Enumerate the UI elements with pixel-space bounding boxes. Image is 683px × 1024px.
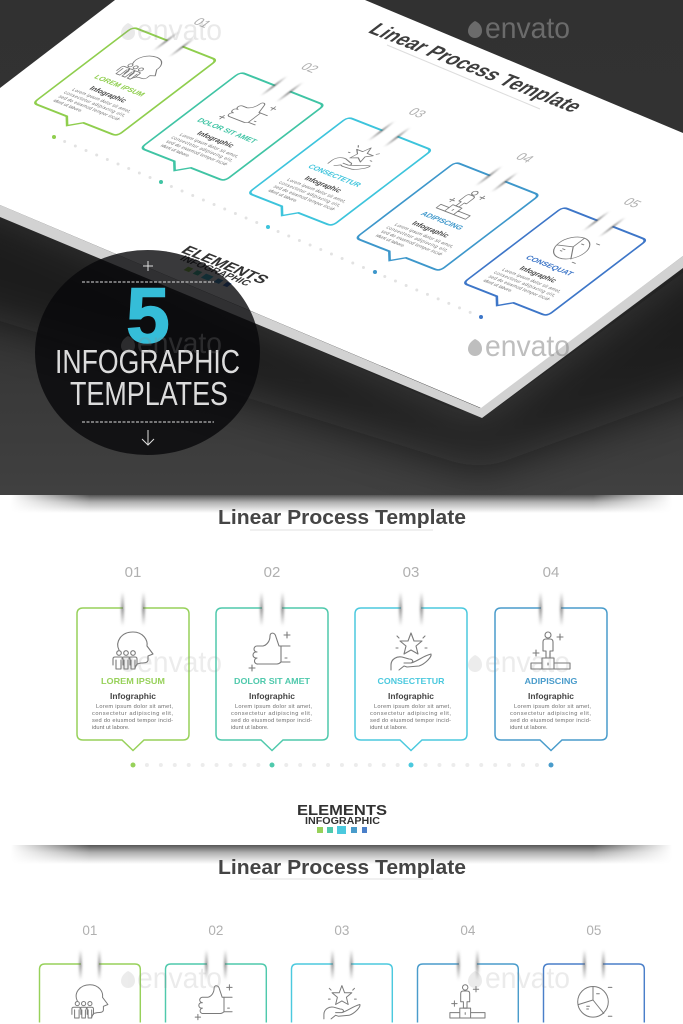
card 02 small (166, 923, 266, 1022)
mockup card 5: sed do eiusmod tempor incid- (486, 274, 552, 302)
mockup card 5: 05 (620, 195, 645, 210)
mockup card 4: ADIPISCING (418, 210, 466, 231)
mockup card 5: Infographic (517, 265, 559, 284)
card 01: LOREM IPSUM (101, 676, 165, 686)
card 04: 04 (543, 564, 559, 581)
card 02: sed do eiusmod tempor incid- (231, 718, 312, 724)
board side edge (0, 205, 683, 418)
mockup card 3: idunt ut labore. (266, 189, 299, 204)
elements infographic logo: INFOGRAPHIC (305, 816, 380, 827)
mockup card 4: Lorem ipsum dolor sit amet, (392, 223, 455, 249)
card 01: Lorem ipsum dolor sit amet, (96, 704, 173, 710)
mockup card 1: sed do eiusmod tempor incid- (56, 94, 122, 122)
mockup logo: INFOGRAPHIC (177, 254, 254, 288)
watermark: section 3 right: envato (485, 962, 570, 995)
mockup card 2: sed do eiusmod tempor incid- (164, 139, 230, 167)
card 01: sed do eiusmod tempor incid- (92, 718, 173, 724)
mockup card 3: Lorem ipsum dolor sit amet, (285, 178, 348, 204)
card 01: Infographic (110, 691, 156, 701)
section 2 background (0, 495, 683, 845)
card 04: consectetur adipiscing elit, (510, 711, 591, 717)
section 3: five-step template (40, 857, 644, 1022)
tilted mockup board (0, 0, 683, 418)
card 05 small (544, 923, 644, 1022)
mockup card 4: sed do eiusmod tempor incid- (379, 229, 445, 257)
card 05 small: 05 (586, 923, 601, 938)
card 03 small (292, 923, 392, 1022)
mockup card 4: Infographic (410, 220, 452, 239)
mockup logo: ELEMENTS (177, 244, 273, 287)
card 02: Lorem ipsum dolor sit amet, (235, 704, 312, 710)
card 02: 02 (264, 564, 280, 581)
mockup timeline dots (54, 137, 481, 317)
card 04: idunt ut labore. (510, 725, 548, 731)
section 2 top shadow band (0, 495, 683, 513)
mockup card 5: consectetur adipiscing elit, (492, 270, 557, 298)
card 03: Infographic (388, 691, 434, 701)
mockup card 1: LOREM IPSUM (92, 73, 147, 98)
mockup card 2: Infographic (195, 130, 237, 149)
section 3 title: Linear Process Template (218, 857, 466, 879)
elements infographic logo (297, 802, 387, 834)
down arrow icon (142, 430, 154, 445)
top dashed rule (82, 281, 214, 283)
watermark: section 3 left: envato (137, 962, 222, 995)
mockup card 4: 04 (512, 150, 538, 165)
badge circle (35, 250, 260, 455)
mockup card 1: idunt ut labore. (51, 99, 84, 114)
card 04: Lorem ipsum dolor sit amet, (514, 704, 591, 710)
mockup card 4: consectetur adipiscing elit, (384, 225, 450, 253)
card 02: Infographic (249, 691, 295, 701)
card 04 small: 04 (460, 923, 476, 938)
mockup card 3: sed do eiusmod tempor incid- (271, 184, 337, 212)
card 01 (77, 564, 189, 750)
card 04 small (418, 923, 518, 1022)
mockup card 3: 03 (405, 105, 430, 120)
mockup title underline (387, 45, 540, 109)
badge heading line 2: TEMPLATES (70, 375, 228, 412)
card 02: DOLOR SIT AMET (234, 676, 311, 686)
section 2 title: Linear Process Template (218, 507, 466, 529)
mockup card 2: DOLOR SIT AMET (195, 117, 260, 145)
plus icon (143, 261, 153, 271)
mockup infographic content (25, 1, 681, 322)
watermark: top left: envato (137, 14, 222, 47)
card 04: ADIPISCING (524, 676, 578, 686)
section 3 title underline (250, 878, 433, 880)
mockup card 3: CONSECTETUR (306, 163, 364, 189)
mockup card 2: 02 (297, 60, 323, 75)
card 03: Lorem ipsum dolor sit amet, (374, 704, 451, 710)
card 03: CONSECTETUR (378, 676, 444, 686)
card 02 (216, 564, 328, 750)
card 01 small (40, 923, 140, 1022)
big number 5: 5 (126, 271, 170, 359)
dark textured background (0, 0, 683, 495)
mockup card 5: CONSEQUAT (523, 254, 576, 278)
card 02 small: 02 (208, 923, 223, 938)
card 02: idunt ut labore. (231, 725, 269, 731)
card 03: idunt ut labore. (370, 725, 408, 731)
card 01: 01 (125, 564, 141, 581)
timeline dots (130, 762, 554, 768)
card 04: Infographic (528, 691, 574, 701)
mockup card 3: consectetur adipiscing elit, (277, 180, 342, 208)
section 3 top shadow band (0, 845, 683, 864)
mockup card 5: idunt ut labore. (481, 279, 514, 294)
card 03 (355, 564, 467, 750)
mockup card 4: idunt ut labore. (373, 234, 407, 249)
mockup card 1 (25, 1, 251, 142)
board shadow (0, 218, 683, 482)
card 01: consectetur adipiscing elit, (92, 711, 173, 717)
board surface (0, 0, 683, 408)
mockup card 1: Infographic (87, 85, 129, 104)
mockup card 5: Lorem ipsum dolor sit amet, (500, 268, 563, 294)
watermark: section 2 right: envato (485, 646, 570, 679)
mockup card 1: consectetur adipiscing elit, (62, 90, 127, 118)
watermark: section 2 left: envato (137, 646, 222, 679)
watermark: top right: envato (485, 12, 570, 45)
mockup card 1: 01 (190, 15, 215, 30)
card 01 small: 01 (82, 923, 97, 938)
mockup card 4 (348, 136, 573, 277)
mockup timeline markers (52, 135, 483, 319)
card 03: 03 (403, 564, 419, 581)
mockup card 3 (240, 91, 466, 232)
card 04 (495, 564, 607, 750)
section 2 title underline (250, 529, 433, 531)
watermark: mid right: envato (485, 330, 570, 363)
mockup title: Linear Process Template (363, 20, 588, 116)
mockup card 2: idunt ut labore. (158, 144, 192, 159)
mockup card 2: Lorem ipsum dolor sit amet, (177, 133, 240, 159)
card 04: sed do eiusmod tempor incid- (510, 718, 591, 724)
mockup card 2 (133, 46, 358, 187)
mockup card 3: Infographic (302, 175, 344, 194)
mockup card 5 (455, 181, 681, 322)
elements infographic logo: ELEMENTS (297, 802, 387, 819)
card 03: consectetur adipiscing elit, (370, 711, 451, 717)
bottom dashed rule (82, 421, 214, 423)
mockup card 1: Lorem ipsum dolor sit amet, (70, 88, 133, 114)
mockup logo (165, 244, 273, 296)
mockup card 2: consectetur adipiscing elit, (169, 135, 235, 163)
card 02: consectetur adipiscing elit, (231, 711, 312, 717)
section 2: four-step template (77, 507, 607, 834)
badge: 5 infographic templates (35, 250, 260, 455)
badge heading line 1: INFOGRAPHIC (55, 343, 240, 380)
watermark: circle: envato (137, 327, 222, 360)
card 03 small: 03 (334, 923, 349, 938)
card 03: sed do eiusmod tempor incid- (370, 718, 451, 724)
card 01: idunt ut labore. (92, 725, 130, 731)
